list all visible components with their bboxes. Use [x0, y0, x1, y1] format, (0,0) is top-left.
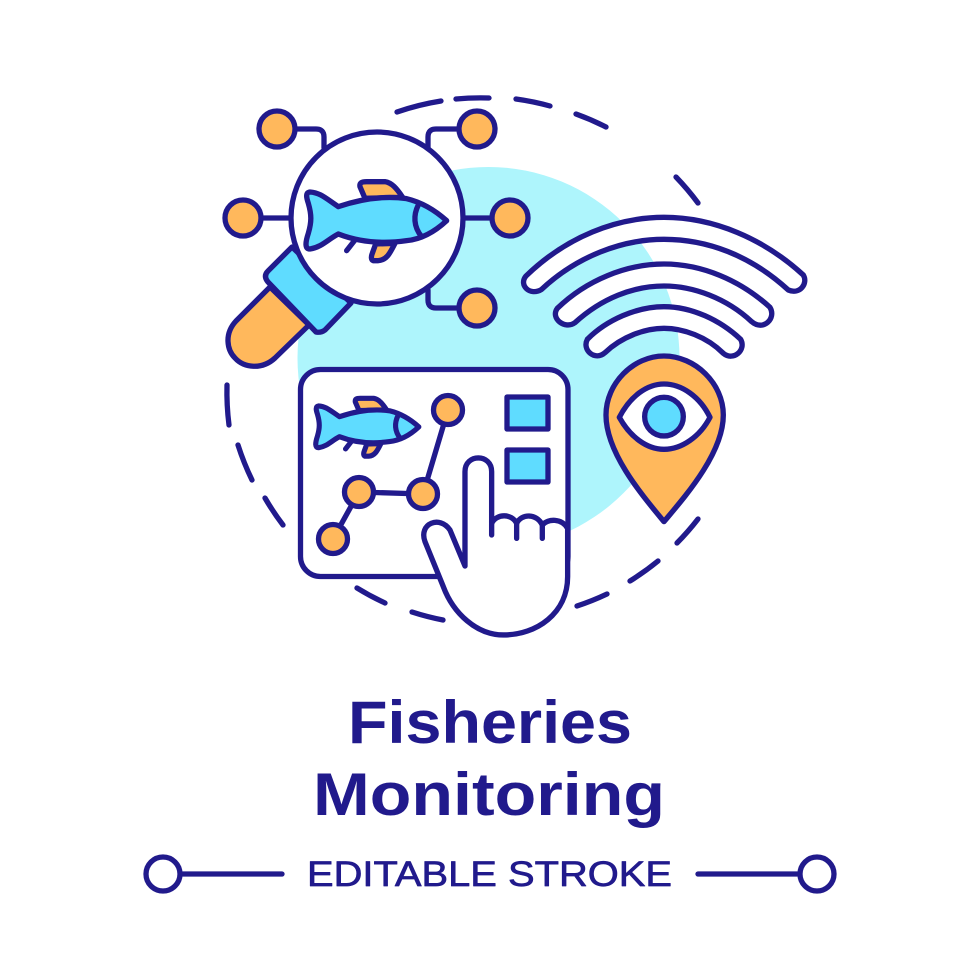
title: Fisheries: [348, 689, 632, 756]
dashed ring: [227, 98, 698, 620]
fish in lens: [306, 182, 447, 261]
title: [313, 689, 665, 828]
connector lines: [261, 129, 492, 308]
dashboard panel: [300, 370, 568, 576]
footer: editable stroke: [146, 855, 834, 894]
title: Monitoring: [313, 761, 665, 828]
icon: pointing hand: [424, 458, 568, 635]
node circles: [225, 111, 528, 326]
footer: editable stroke: EDITABLE STROKE: [307, 855, 672, 894]
line chart on panel: [318, 396, 462, 554]
icon: magnifying glass with fish and nodes: [225, 111, 528, 366]
background blob: [298, 167, 680, 549]
fish on panel: [316, 398, 419, 456]
icon: location pin with eye: [606, 356, 723, 522]
panel buttons: [507, 397, 548, 482]
magnifier lens: [291, 132, 463, 304]
icon: wifi signal: [524, 217, 805, 356]
magnifier handle: [228, 287, 309, 366]
magnifier collar: [266, 247, 351, 332]
